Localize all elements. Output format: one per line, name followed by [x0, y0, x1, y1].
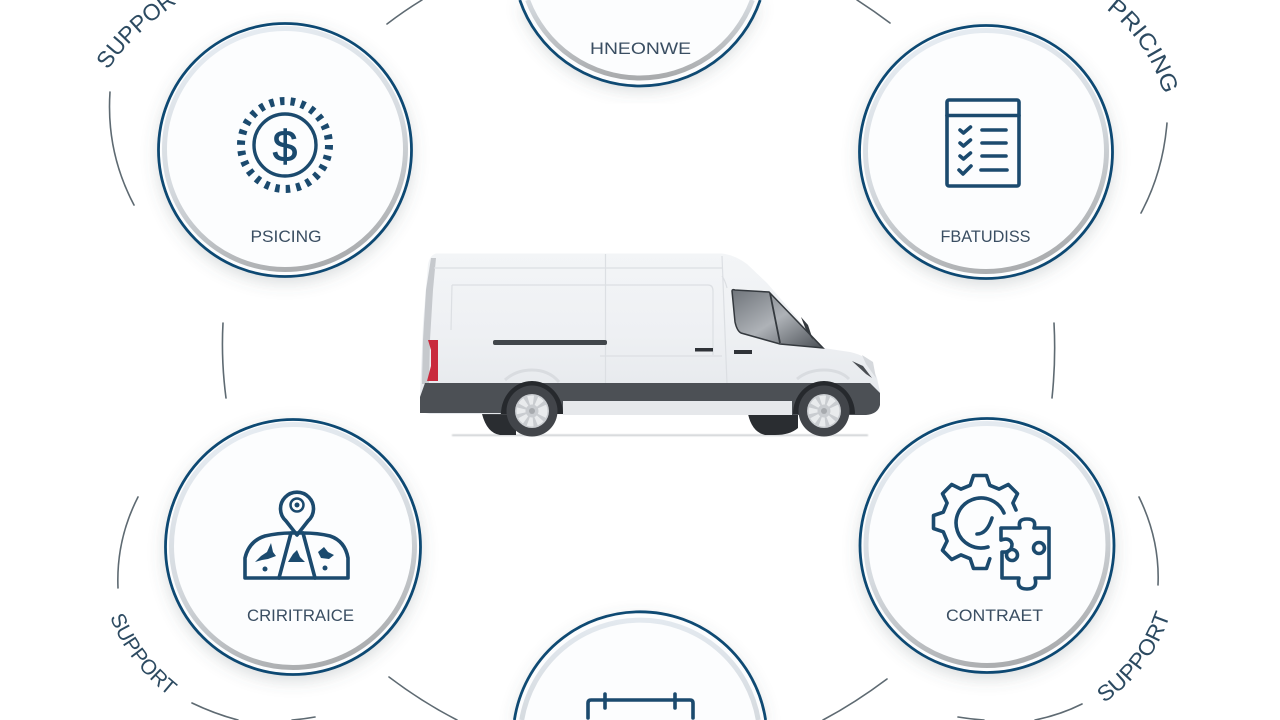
arch lip — [505, 370, 849, 382]
van body — [420, 254, 880, 415]
headlight — [852, 361, 872, 378]
curved label: support bottom left: SUPPORT — [112, 614, 178, 693]
label: contract circle: CONTRAET — [946, 606, 1043, 625]
icon: gear and puzzle piece — [934, 476, 1049, 589]
icon: calendar — [588, 694, 693, 718]
panel: top circle — [520, 0, 760, 86]
roof and panel lines — [434, 254, 727, 384]
icon: map with pin — [245, 492, 348, 578]
wheel arches — [501, 381, 855, 414]
icon: dollar coin: $ — [273, 122, 297, 171]
icon: checklist — [947, 100, 1019, 186]
center van illustration — [420, 254, 880, 436]
panel: coverage circle — [166, 420, 420, 674]
mirror — [801, 317, 813, 340]
side rail — [493, 340, 607, 345]
label: coverage circle: CRIRITRAICE — [247, 606, 354, 625]
panel: pricing circle — [158, 24, 412, 276]
icon: dollar coin — [241, 101, 329, 189]
ground shadow — [452, 434, 868, 436]
panel: contract circle — [860, 418, 1114, 672]
lower dark band and bumpers — [420, 383, 880, 415]
label: features circle: FBATUDISS — [940, 227, 1030, 246]
panel: bottom circle — [514, 612, 766, 720]
window pillar — [770, 293, 780, 343]
rear wheel — [506, 386, 558, 436]
door handles — [695, 348, 752, 354]
front wheel — [798, 386, 850, 436]
label: top circle: HNEONWE — [590, 39, 691, 58]
silver sill — [563, 402, 792, 415]
curved label: support bottom right: SUPPORT — [1098, 610, 1168, 701]
label: pricing circle: PSICING — [250, 227, 322, 246]
red tail light — [427, 340, 438, 381]
panel: features circle — [860, 26, 1112, 278]
side window — [732, 290, 823, 348]
rear edge shading — [422, 258, 436, 384]
far-side wheels — [482, 414, 798, 435]
